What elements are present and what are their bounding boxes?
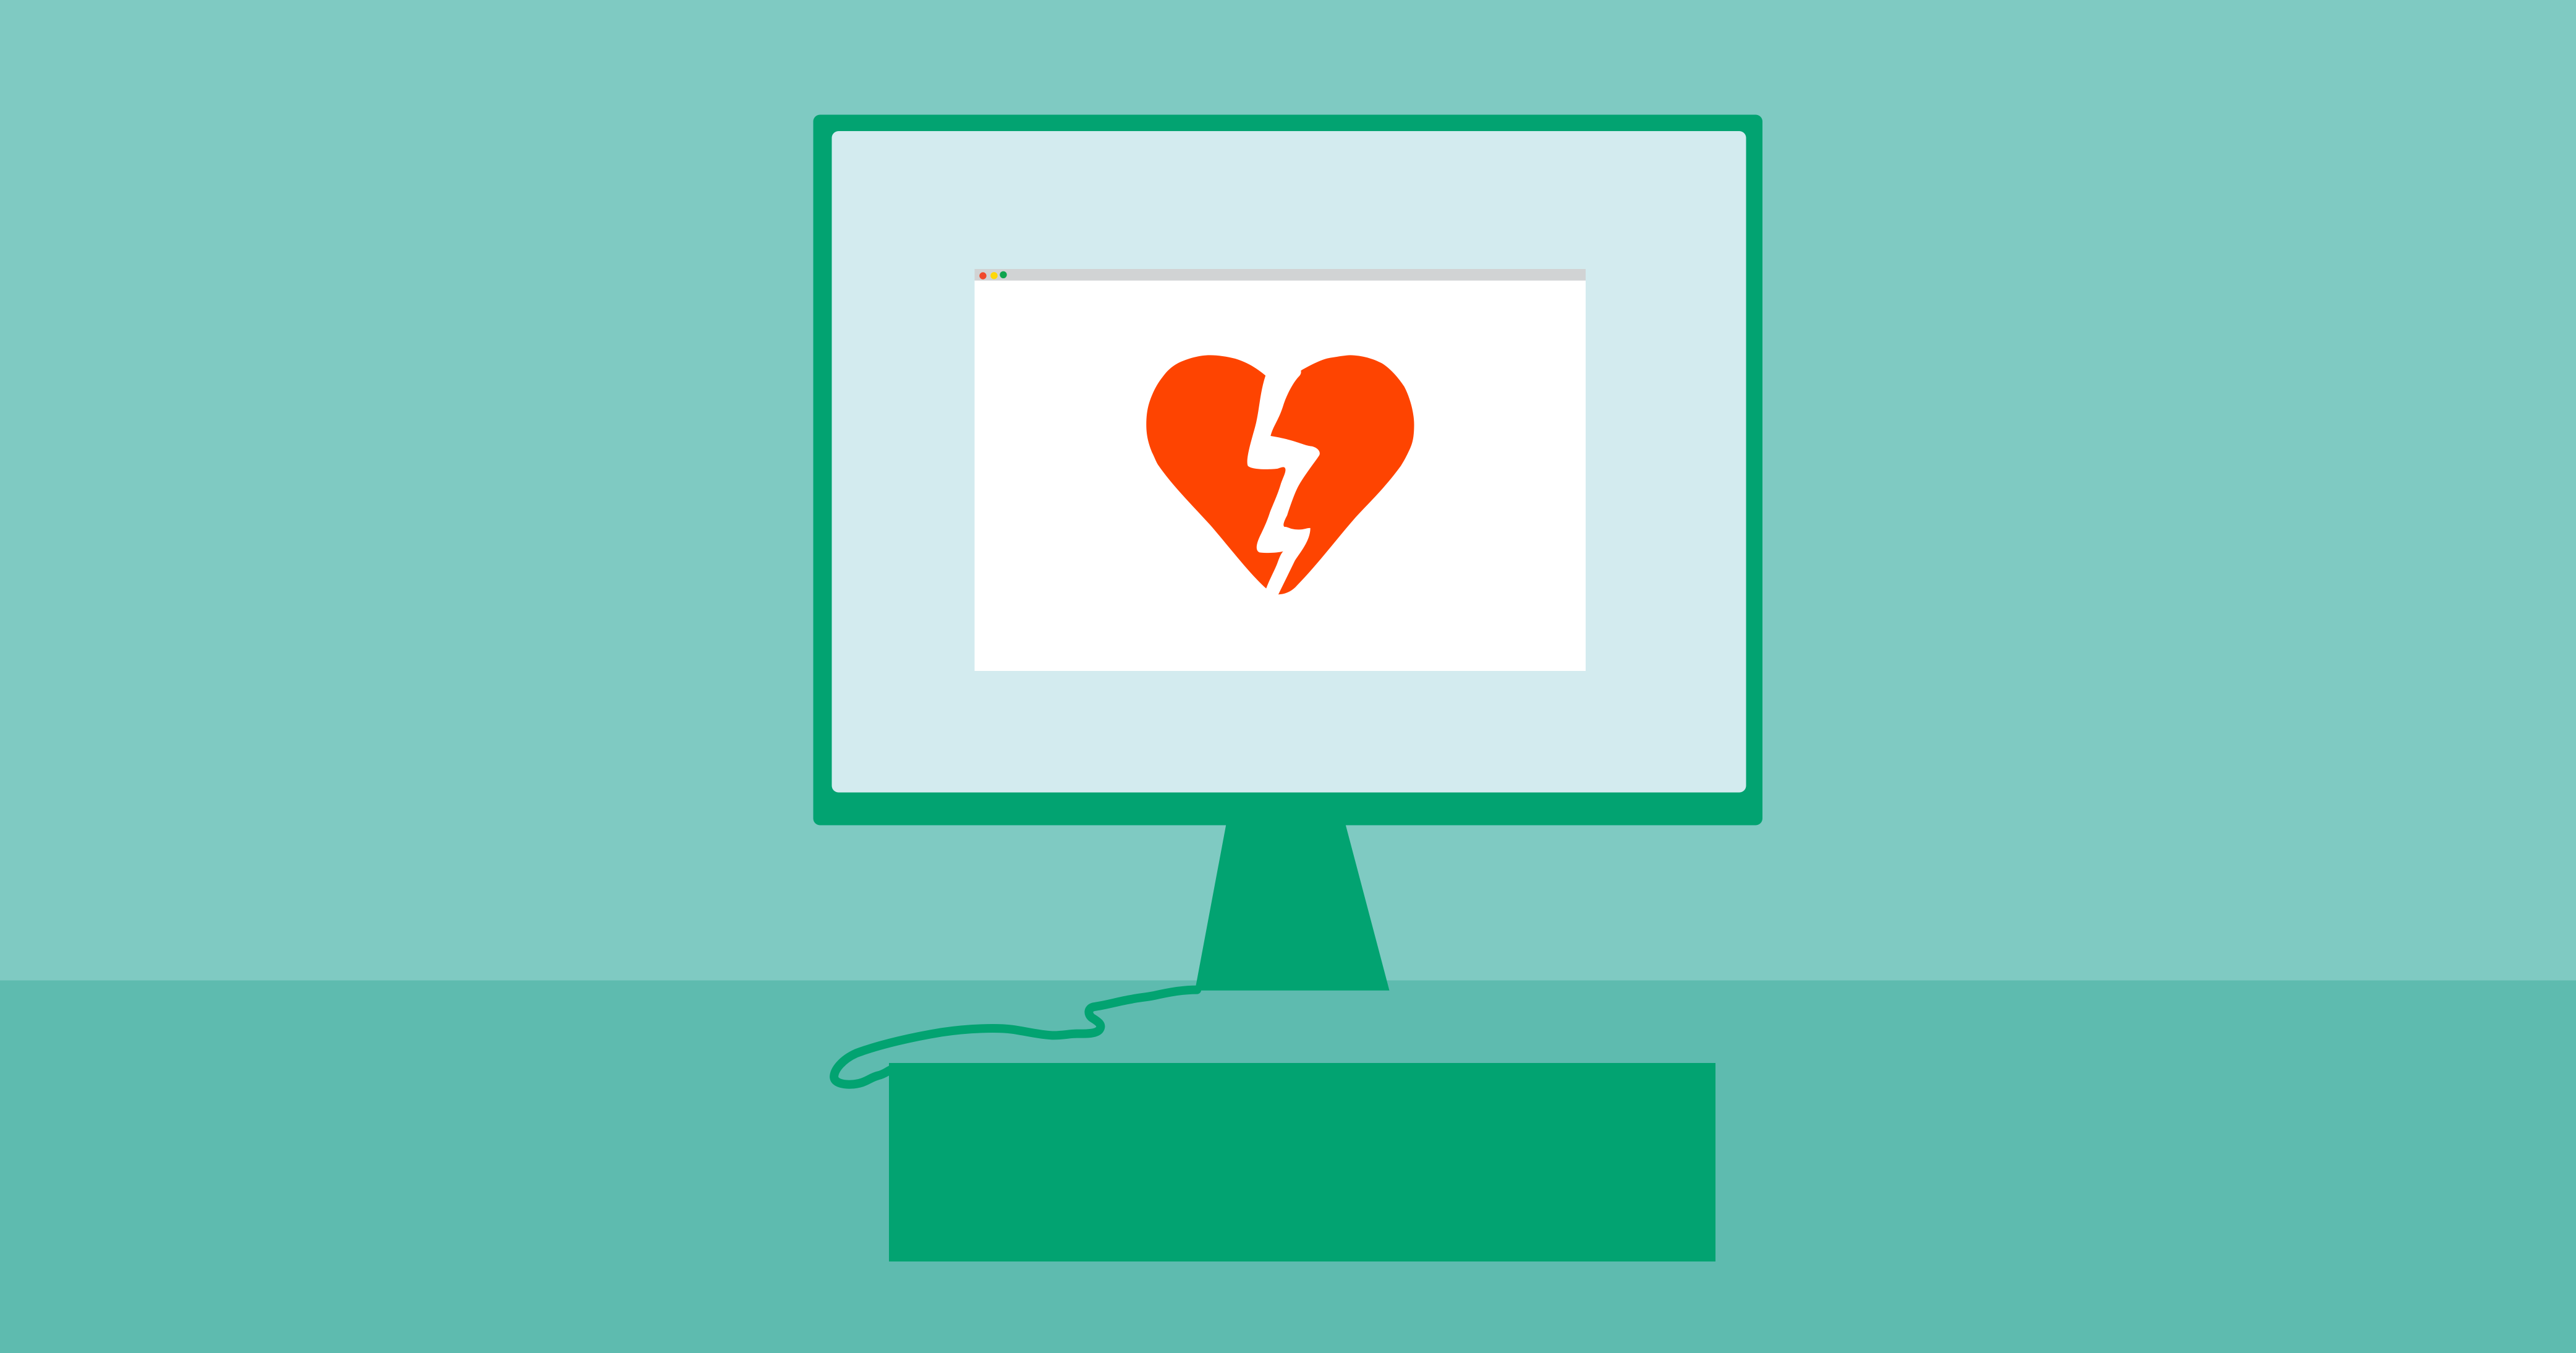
title bar [974, 269, 1586, 281]
desk surface [0, 981, 2576, 1353]
window button: yellow [990, 272, 998, 279]
browser window [974, 269, 1586, 671]
monitor cable [834, 990, 1197, 1085]
window button: green [1000, 271, 1007, 278]
icon: broken heart [1146, 355, 1414, 594]
monitor frame [814, 115, 1762, 825]
background wall [0, 0, 2576, 981]
window button: red [979, 272, 987, 280]
heart right half [1270, 355, 1414, 594]
window body [974, 269, 1586, 671]
computer base [889, 1063, 1715, 1261]
monitor stand [1195, 822, 1390, 991]
heart left half [1146, 355, 1285, 589]
monitor screen [832, 131, 1746, 793]
